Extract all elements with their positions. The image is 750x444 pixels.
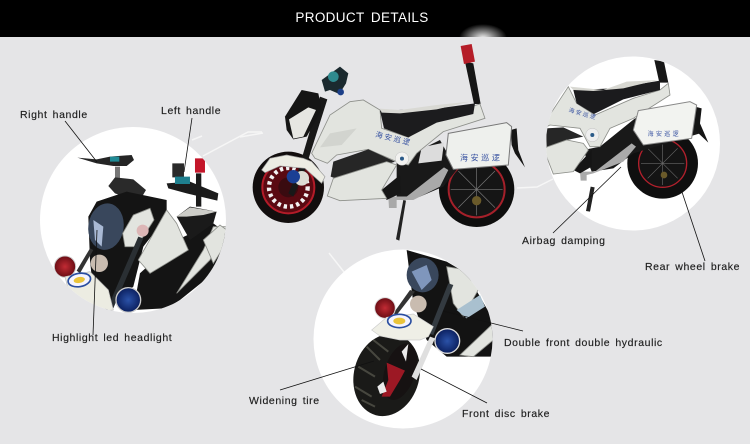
body decal: 海安巡逻 bbox=[568, 106, 598, 122]
seat highlight bbox=[570, 80, 658, 91]
fender bbox=[65, 272, 113, 313]
windscreen bbox=[108, 177, 146, 197]
beige lamp bbox=[410, 296, 427, 312]
body decal: 海安巡逻 bbox=[375, 130, 413, 148]
lower fairing bbox=[327, 162, 397, 201]
pannier bbox=[203, 225, 227, 263]
beacon pole bbox=[654, 60, 668, 83]
main motorcycle bbox=[253, 44, 525, 241]
red lamp bbox=[375, 298, 395, 318]
pannier bbox=[633, 102, 697, 145]
rear wheel bbox=[627, 139, 698, 199]
lower fairing bbox=[543, 140, 588, 174]
handlebars bbox=[77, 155, 134, 166]
pannier decal: 海安巡逻 bbox=[648, 130, 681, 138]
seat bbox=[380, 103, 475, 137]
tank panel shading bbox=[320, 128, 357, 147]
label: right handle bbox=[20, 109, 97, 162]
white bodywork bbox=[540, 83, 670, 147]
hub cap bbox=[586, 128, 599, 142]
circle detail: handles and headlight bbox=[40, 127, 227, 313]
fork guard bbox=[294, 171, 309, 186]
beacon pole bbox=[465, 62, 481, 104]
headlight bbox=[88, 203, 124, 250]
hub cap bbox=[395, 152, 409, 165]
blue lamp bbox=[435, 329, 460, 353]
circle detail: front wheel bbox=[314, 250, 493, 428]
red reflector small bbox=[137, 225, 149, 237]
rear wheel bbox=[439, 152, 514, 227]
label: highlight led headlight bbox=[52, 230, 172, 344]
label: rear wheel brake: Rear wheel brake bbox=[645, 261, 740, 273]
tail bbox=[695, 107, 708, 143]
beige lamp bbox=[91, 255, 108, 272]
handlebar bbox=[322, 67, 348, 94]
tail bbox=[511, 128, 525, 167]
label: front disc brake bbox=[421, 369, 550, 420]
badge bbox=[67, 271, 92, 289]
pannier decal: 海安巡逻 bbox=[460, 153, 503, 163]
tyre bbox=[353, 336, 420, 416]
label: double front double hydraulic bbox=[443, 311, 663, 349]
white panels bbox=[447, 267, 480, 317]
silver swingarm bbox=[388, 167, 448, 208]
seat highlight bbox=[380, 102, 470, 113]
label: double front double hydraulic: Double front double hydraulic bbox=[504, 337, 663, 349]
label: left handle: Left handle bbox=[161, 105, 221, 117]
red lamp bbox=[54, 256, 76, 277]
front wheel bbox=[253, 152, 324, 223]
forks bbox=[428, 283, 453, 335]
silver swingarm bbox=[580, 143, 636, 181]
blue lamp bbox=[116, 288, 141, 312]
label: airbag damping bbox=[522, 167, 621, 247]
badge bbox=[388, 314, 411, 328]
red disc bbox=[382, 363, 405, 397]
blue light bbox=[287, 170, 300, 183]
tread bbox=[355, 340, 388, 407]
circle detail: airbag damping and rear brake bbox=[540, 56, 720, 230]
label: right handle: Right handle bbox=[20, 109, 88, 121]
dark panel bbox=[546, 127, 583, 148]
label: widening tire bbox=[249, 361, 374, 407]
front fender bbox=[262, 155, 325, 183]
pannier box bbox=[446, 123, 512, 169]
kick stand bbox=[586, 187, 595, 212]
title: PRODUCT DETAILS bbox=[295, 10, 429, 25]
lower fairing dark panel bbox=[331, 149, 395, 180]
label: left handle bbox=[161, 105, 221, 172]
rim highlights bbox=[377, 382, 387, 394]
label: highlight led headlight: Highlight led headlight bbox=[52, 332, 172, 344]
header bar bbox=[0, 0, 750, 37]
frame gap bbox=[418, 143, 444, 163]
frame dark bbox=[397, 140, 457, 197]
headlight bbox=[407, 258, 439, 292]
label: widening tire: Widening tire bbox=[249, 395, 320, 407]
white side panels bbox=[123, 208, 154, 247]
fender bbox=[372, 314, 433, 340]
seat bbox=[573, 81, 660, 114]
frame dark bbox=[585, 118, 699, 172]
wheel bbox=[376, 339, 424, 404]
body dark bbox=[407, 250, 493, 357]
forks bbox=[77, 248, 93, 273]
kickstand bbox=[396, 200, 406, 241]
label: front disc brake: Front disc brake bbox=[462, 408, 550, 420]
main body fairing bbox=[312, 100, 485, 165]
rear dark frame bbox=[133, 223, 227, 310]
engine dark bbox=[382, 175, 401, 200]
head body bbox=[88, 192, 167, 310]
headlight housing bbox=[285, 90, 322, 139]
engine dark bbox=[574, 156, 590, 174]
beacon bbox=[196, 173, 201, 207]
front fork bbox=[288, 97, 327, 197]
label: airbag damping: Airbag damping bbox=[522, 235, 606, 247]
seat bbox=[176, 206, 217, 236]
red beacon bbox=[461, 44, 475, 64]
decorative connector streaks bbox=[192, 132, 553, 272]
label: rear wheel brake bbox=[645, 192, 740, 273]
